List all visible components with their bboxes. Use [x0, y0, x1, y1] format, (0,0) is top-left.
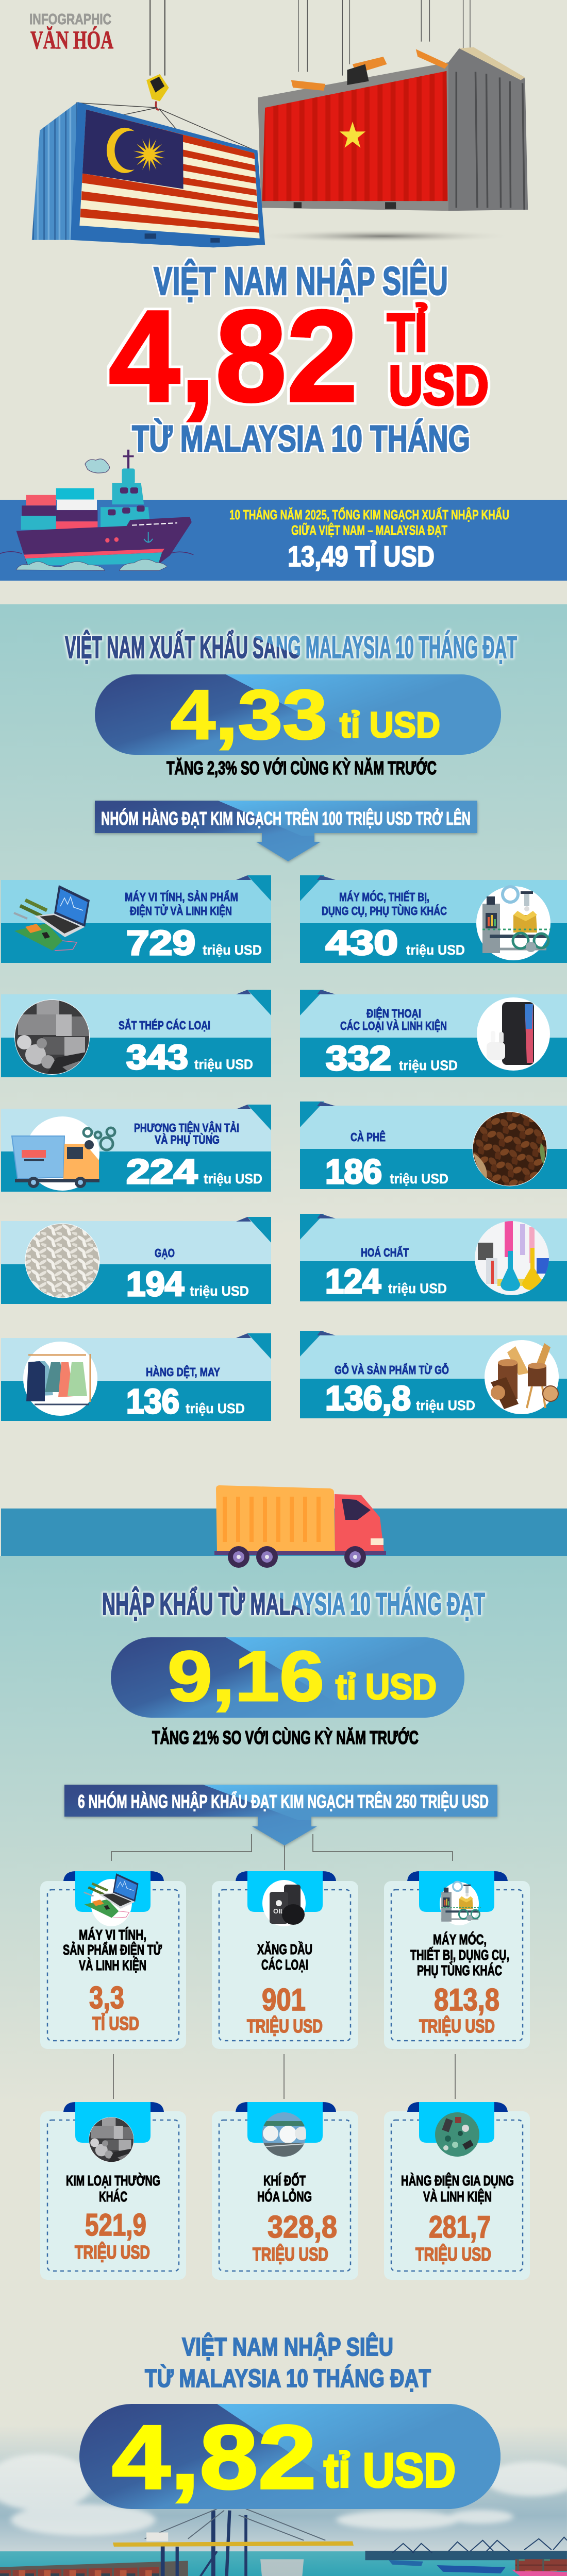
card: steel 343 [1, 990, 271, 1077]
card: computers 3,3 tỉ USD: SẢN PHẨM ĐIỆN TỬ [63, 1941, 162, 1958]
headline figure: 4,82 tỉ USD: TỈ [387, 302, 427, 362]
card: vehicles 224: 224 [126, 1153, 197, 1191]
title: Việt Nam nhập siêu closing: TỪ MALAYSIA 10 THÁNG ĐẠT [145, 2364, 431, 2393]
callout: import value pill: 9,16 [168, 1637, 324, 1716]
container: Malaysia flag [32, 0, 265, 247]
callout: export value pill: tỉ USD [340, 705, 440, 745]
card: machinery 430: triệu USD [406, 942, 465, 958]
card: household electronics 281,7: VÀ LINH KIỆN [423, 2189, 492, 2205]
logo: Infographic Văn Hóa [29, 11, 113, 54]
text: between Vietnam and Malaysia: GIỮA VIỆT NAM – MALAYSIA ĐẠT [291, 522, 447, 538]
band: truck divider [1, 1509, 567, 1556]
card: coffee 186: triệu USD [390, 1171, 448, 1187]
card: liquefied gas 328,8: KHÍ ĐỐT [263, 2172, 306, 2189]
headline figure: 4,82 tỉ USD [109, 284, 489, 429]
card: steel 343: 343 [126, 1038, 188, 1077]
icon: circuit board [435, 2112, 479, 2157]
card: vehicles 224: VÀ PHỤ TÙNG [155, 1132, 220, 1146]
port land and container yard [0, 2561, 188, 2576]
callout: import value pill [111, 1637, 464, 1718]
card: coffee 186 [300, 1101, 567, 1191]
card: petroleum 901: TRIỆU USD [247, 2015, 323, 2037]
card: textiles 136: triệu USD [186, 1401, 245, 1416]
card: machinery 813,8: 813,8 [434, 1982, 499, 2017]
icon: steel [14, 999, 90, 1075]
card: chemicals 124: triệu USD [388, 1281, 447, 1296]
crane [163, 2511, 246, 2576]
headline figure: 4,82 tỉ USD: USD [389, 354, 489, 416]
card: petroleum 901 [212, 1871, 358, 2049]
icon: laptop [84, 1873, 139, 1926]
illustration: container port photo scene [0, 2426, 567, 2576]
card: household electronics 281,7: HÀNG ĐIỆN GIA DỤNG [401, 2173, 514, 2189]
banner with arrow: export product groups [95, 801, 477, 861]
card: wood 136,8: 136,8 [325, 1379, 411, 1418]
card: textiles 136 [1, 1333, 271, 1421]
card: vehicles 224: triệu USD [204, 1171, 262, 1187]
card: base metals 521,9: KIM LOẠI THƯỜNG [66, 2173, 160, 2189]
icon: cargo ship [0, 450, 193, 570]
card: base metals 521,9: TRIỆU USD [75, 2241, 150, 2263]
card: vehicles 224 [1, 1105, 271, 1192]
icon: oil barrels: OIL [273, 1907, 285, 1915]
card: vehicles 224: PHƯƠNG TIỆN VẬN TẢI [134, 1120, 239, 1134]
text: export growth: TĂNG 2,3% SO VỚI CÙNG KỲ NĂM TRƯỚC [166, 757, 437, 778]
text: import growth: TĂNG 21% SO VỚI CÙNG KỲ NĂM TRƯỚC [152, 1726, 419, 1748]
card: textiles 136: HÀNG DỆT, MAY [146, 1365, 220, 1379]
card: machinery 813,8: THIẾT BỊ, DỤNG CỤ, [410, 1947, 509, 1963]
card: phones 332: 332 [326, 1039, 391, 1078]
icon: clothes on rack [23, 1342, 97, 1416]
title: Việt Nam nhập siêu closing [145, 2333, 431, 2393]
card: rice 194 [1, 1217, 271, 1304]
icon: machinery [476, 886, 551, 960]
icon: delivery truck [214, 1485, 386, 1568]
callout: trade deficit pill: tỉ USD [324, 2443, 456, 2497]
shadow under containers [253, 229, 513, 243]
icon: oil barrels [262, 1880, 306, 1926]
card: computers 3,3 tỉ USD: MÁY VI TÍNH, [79, 1927, 146, 1943]
card: computers 3,3 tỉ USD: 3,3 [89, 1980, 124, 2015]
subtitle: từ Malaysia 10 tháng: TỪ MALAYSIA 10 THÁNG [132, 419, 470, 460]
card: computers 729: MÁY VI TÍNH, SẢN PHẨM [125, 889, 238, 904]
card: base metals 521,9: KHÁC [99, 2189, 127, 2205]
card: computers 729 [1, 875, 271, 963]
card: phones 332: CÁC LOẠI VÀ LINH KIỆN [340, 1019, 447, 1032]
icon: gas tanks [262, 2112, 308, 2158]
card: household electronics 281,7: TRIỆU USD [415, 2243, 491, 2265]
card: liquefied gas 328,8: TRIỆU USD [253, 2243, 328, 2265]
card: base metals 521,9: 521,9 [85, 2208, 146, 2242]
container: Vietnam flag [258, 0, 528, 211]
card: computers 3,3 tỉ USD: TỈ USD [92, 2013, 139, 2034]
logo: Infographic Văn Hóa: INFOGRAPHIC [29, 11, 111, 28]
card: machinery 430: 430 [326, 924, 398, 962]
card: coffee 186: 186 [325, 1153, 382, 1191]
card: wood 136,8 [300, 1331, 567, 1418]
icon: machinery [440, 1882, 481, 1925]
card: computers 3,3 tỉ USD: VÀ LINH KIỆN [79, 1957, 146, 1973]
card: liquefied gas 328,8: HÓA LỎNG [257, 2188, 312, 2205]
card: machinery 813,8: PHỤ TÙNG KHÁC [417, 1962, 502, 1978]
card: phones 332 [300, 990, 567, 1078]
card: liquefied gas 328,8 [212, 2102, 358, 2280]
card: machinery 813,8: TRIỆU USD [419, 2015, 495, 2037]
headline figure: 4,82 tỉ USD: 4,82 [109, 284, 358, 429]
card: chemicals 124: HOÁ CHẤT [361, 1245, 409, 1259]
card: chemicals 124: 124 [325, 1262, 381, 1301]
card: liquefied gas 328,8: 328,8 [268, 2210, 337, 2244]
icon: rice [25, 1224, 99, 1298]
far cranes and ships [365, 2537, 567, 2576]
icon: metal bars [89, 2117, 134, 2162]
icon: phone and earbuds [477, 997, 550, 1071]
icon: coffee beans [473, 1112, 547, 1186]
card: computers 729: triệu USD [203, 942, 262, 958]
connector lines [111, 1834, 455, 2099]
card: petroleum 901: 901 [262, 1982, 306, 2017]
card: machinery 430: MÁY MÓC, THIẾT BỊ, [339, 890, 429, 904]
card: phones 332: triệu USD [399, 1058, 458, 1073]
icon: laptop and circuit [14, 885, 90, 951]
icon: wood and logs [485, 1340, 559, 1414]
card: machinery 813,8 [384, 1871, 530, 2049]
title: Việt Nam nhập siêu closing: VIỆT NAM NHẬP SIÊU [182, 2333, 393, 2361]
title: Việt Nam nhập siêu: VIỆT NAM NHẬP SIÊU [154, 259, 448, 303]
card: petroleum 901: XĂNG DẦU [257, 1941, 312, 1957]
banner with arrow: import product groups [64, 1785, 497, 1845]
card: wood 136,8: triệu USD [416, 1398, 475, 1413]
callout: trade deficit pill [79, 2404, 501, 2509]
illustration: Malaysia and Vietnam flag containers hanging from cranes [32, 0, 528, 247]
card: base metals 521,9 [40, 2102, 186, 2280]
card: wood 136,8: GỖ VÀ SẢN PHẨM TỪ GỖ [335, 1362, 449, 1377]
callout: trade deficit pill: 4,82 [112, 2407, 316, 2508]
figure: 13,49 tỉ USD: 13,49 TỈ USD [288, 540, 435, 572]
card: petroleum 901: CÁC LOẠI [261, 1957, 308, 1973]
card: computers 729: 729 [126, 924, 195, 962]
card: textiles 136: 136 [126, 1382, 179, 1421]
callout: export value pill: 4,33 [171, 675, 327, 754]
card: coffee 186: CÀ PHÊ [351, 1130, 386, 1144]
container ship [260, 2559, 304, 2576]
card: chemicals 124 [300, 1214, 567, 1301]
card: rice 194: triệu USD [190, 1283, 249, 1299]
card: machinery 430 [300, 875, 567, 963]
panel: total trade band [0, 500, 567, 581]
card: phones 332: ĐIỆN THOẠI [366, 1006, 421, 1020]
card: rice 194: GẠO [155, 1246, 175, 1260]
card: household electronics 281,7 [384, 2102, 530, 2280]
callout: import value pill: tỉ USD [336, 1667, 437, 1707]
callout: export value pill [95, 674, 501, 755]
card: machinery 813,8: MÁY MÓC, [433, 1931, 487, 1947]
icon: truck and gears [12, 1116, 115, 1191]
card: rice 194: 194 [126, 1265, 184, 1303]
card: machinery 430: DỤNG CỤ, PHỤ TÙNG KHÁC [322, 904, 447, 918]
card: steel 343: SẮT THÉP CÁC LOẠI [119, 1018, 210, 1032]
panel: import section background [0, 1556, 567, 2190]
card: computers 729: ĐIỆN TỬ VÀ LINH KIỆN [130, 903, 232, 918]
logo: Infographic Văn Hóa: VĂN HÓA [30, 25, 113, 54]
card: steel 343: triệu USD [194, 1057, 253, 1072]
card: computers 3,3 tỉ USD [40, 1871, 186, 2049]
icon: chemical flasks [475, 1221, 549, 1295]
panel: export section background [0, 604, 567, 1238]
card: household electronics 281,7: 281,7 [429, 2210, 491, 2244]
